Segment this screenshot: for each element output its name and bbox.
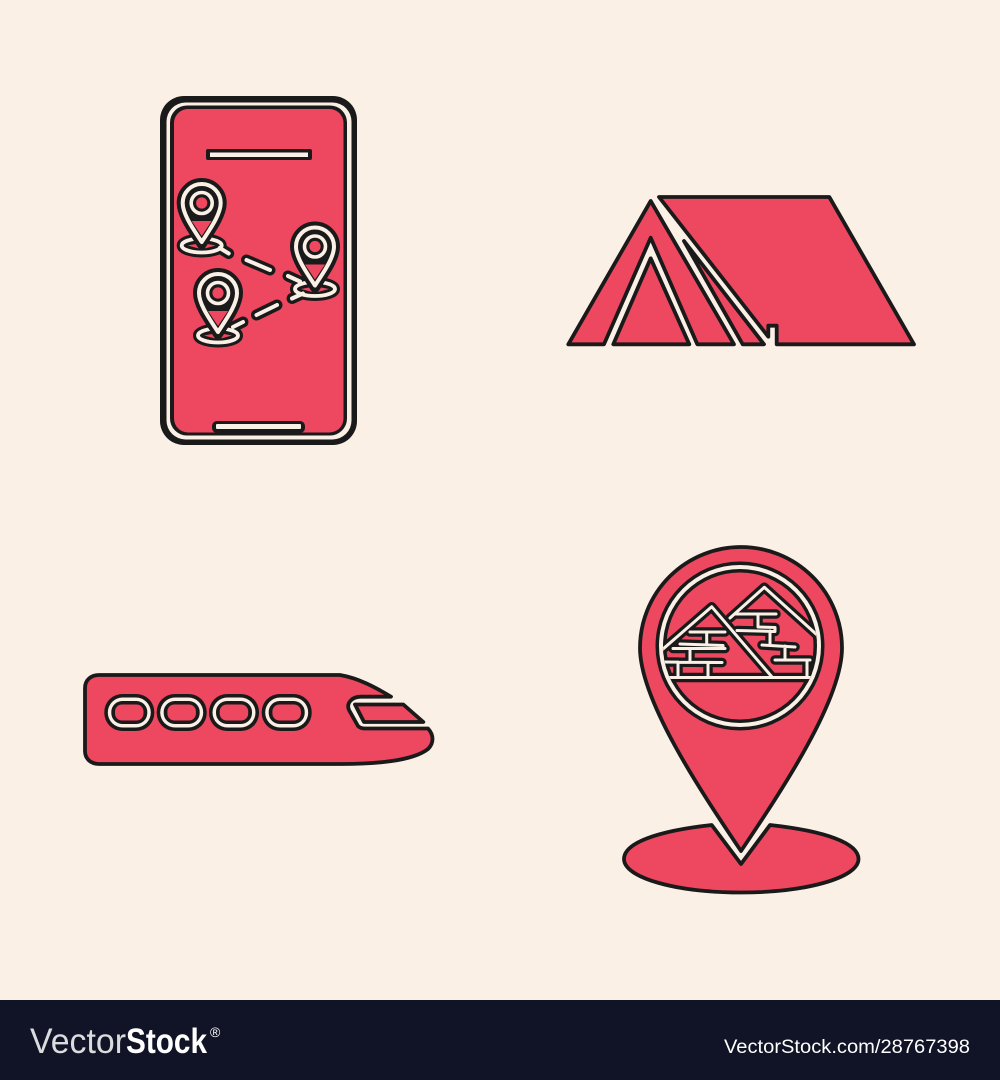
train side window two <box>157 694 207 731</box>
train side window four <box>262 694 312 731</box>
pin body <box>640 547 842 851</box>
map pin one <box>182 184 229 254</box>
route dashes <box>246 260 277 315</box>
map pin three <box>198 274 243 342</box>
train side window three <box>209 694 259 731</box>
train side window one <box>104 694 154 731</box>
phone bottom home bar <box>212 421 305 433</box>
footer image id: VectorStock.com/28767398 <box>724 1036 970 1058</box>
tent front flap <box>568 201 734 344</box>
tent roof side <box>659 197 914 344</box>
icon: high speed train <box>85 675 432 764</box>
icon: camping tent <box>568 197 914 344</box>
tent side sliver <box>684 241 764 344</box>
phone top speaker bar <box>206 149 312 160</box>
train front window <box>355 704 423 722</box>
pin ground shadow <box>624 825 858 892</box>
tent door opening <box>613 258 689 344</box>
footer logo: VectorStock <box>30 1022 207 1061</box>
icon: smartphone with map route <box>160 96 357 445</box>
pin medallion ring <box>656 562 824 730</box>
map pin two <box>288 228 335 298</box>
icon: location pin with pyramids <box>624 547 858 892</box>
train body <box>85 675 432 764</box>
footer registered mark: ® <box>210 1024 221 1040</box>
pyramids <box>655 587 826 678</box>
footer bar <box>0 1000 1000 1080</box>
